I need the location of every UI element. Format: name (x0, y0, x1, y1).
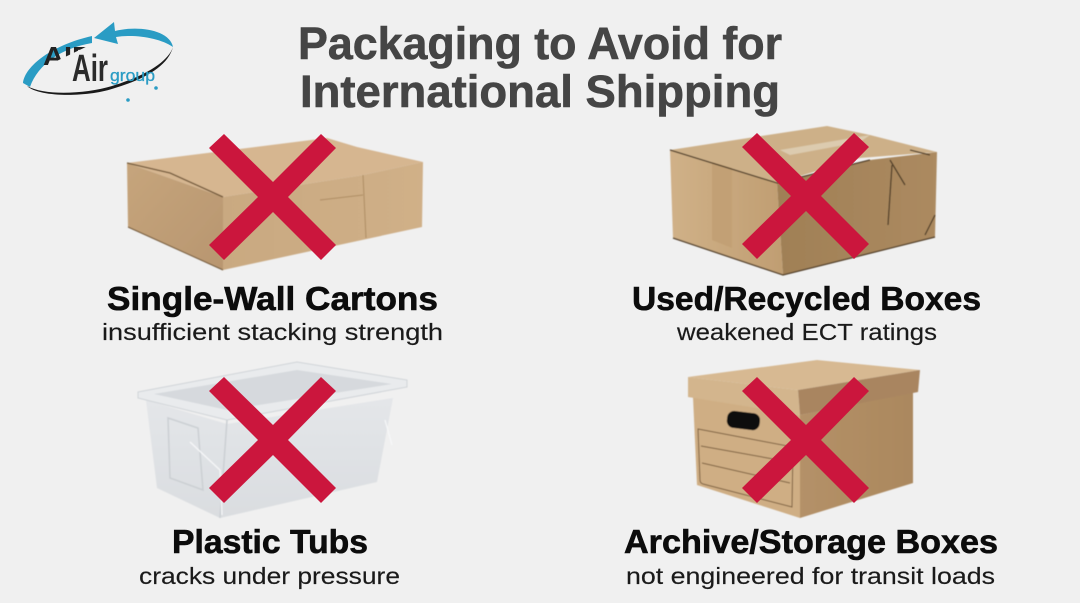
photo: dented carton (127, 138, 423, 270)
heading: Archive/Storage Boxes (624, 523, 998, 560)
panel: single-wall cartons (102, 134, 443, 345)
logo swoosh band (23, 36, 92, 87)
red cross (742, 377, 869, 503)
logo: Air group (23, 22, 173, 102)
panel: plastic tubs (138, 362, 407, 589)
logo lower ellipse line (27, 47, 173, 95)
photo: archive box (688, 360, 920, 518)
red cross (209, 377, 336, 503)
heading: Single-Wall Cartons (107, 280, 438, 317)
caption: insufficient stacking strength (102, 319, 443, 345)
heading: Used/Recycled Boxes (632, 280, 981, 317)
panel: used/recycled boxes (632, 126, 981, 345)
caption: not engineered for transit loads (626, 563, 995, 589)
logo arrow (94, 22, 173, 47)
red cross (209, 134, 336, 260)
heading: Plastic Tubs (172, 523, 368, 560)
logo wordmark group: group (110, 66, 155, 85)
title: Packaging to Avoid for (298, 18, 782, 69)
photo: crushed box (670, 126, 937, 275)
logo ghost lettering: AIR (43, 41, 93, 71)
panel: archive/storage boxes (624, 360, 998, 589)
logo wordmark Air: Air (72, 48, 108, 90)
red cross (742, 133, 869, 259)
title (298, 18, 782, 117)
title: International Shipping (300, 66, 780, 117)
logo dots (126, 86, 158, 102)
caption: cracks under pressure (139, 563, 400, 589)
caption: weakened ECT ratings (676, 319, 937, 345)
photo: clear plastic tub (138, 362, 407, 518)
